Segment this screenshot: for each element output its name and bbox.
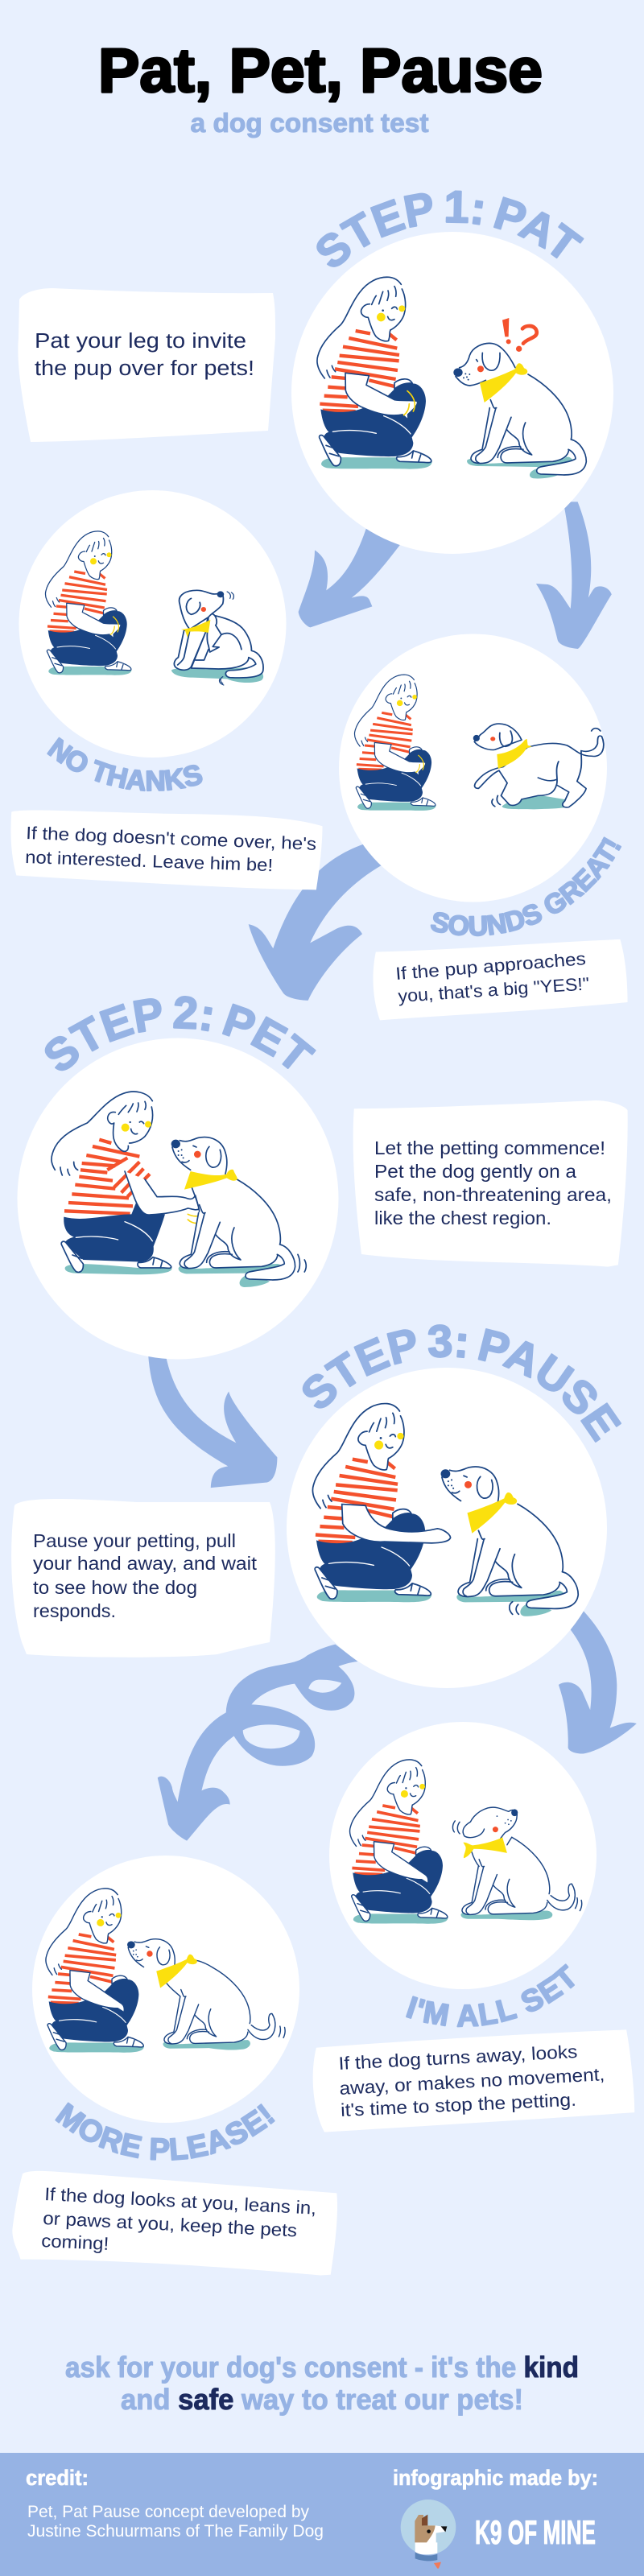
text block: step 1: Pat your leg to invite [35, 330, 246, 353]
illustration: more please dog leaning in [127, 1939, 285, 2050]
illustration: no thanks woman [45, 531, 131, 675]
arrow: step 2 to step 3 [148, 1348, 277, 1488]
text block: no thanks [10, 811, 323, 890]
text block: no thanks: If the dog doesn't come over, he's [26, 823, 317, 854]
heading: all set: I'M ALL SET [406, 1963, 575, 2027]
arrow: step 3 to all set [559, 1602, 637, 1754]
footer credit text [27, 2503, 324, 2541]
closing message: and safe way to treat our pets! [121, 2383, 523, 2416]
footer credit heading: credit: [26, 2466, 89, 2490]
text block: step 2: Let the petting commence! [374, 1137, 605, 1158]
text block: more please [12, 2171, 337, 2276]
text block: step 3: Pause your petting, pull [33, 1530, 236, 1551]
text block: all set: If the dog turns away, looks [338, 2041, 578, 2074]
panel: step 1 circle [291, 232, 613, 554]
title: Pat, Pet, Pause [98, 36, 543, 105]
heading: step 3: STEP 3: PAUSE [303, 1324, 621, 1443]
arrow: sounds great to step 2 [249, 835, 394, 1001]
text block: more please: or paws at you, keep the pets [43, 2208, 298, 2240]
subtitle: a dog consent test [190, 108, 429, 138]
footer credit text: Pet, Pat Pause concept developed by [27, 2503, 309, 2521]
closing message: ask for your dog's consent - it's the kind [65, 2351, 579, 2384]
heading: step 1: STEP 1: PAT [316, 190, 584, 267]
text block: step 2: Pet the dog gently on a [374, 1161, 576, 1182]
heading: no thanks: NO THANKS [47, 737, 203, 792]
text block: sounds great [373, 939, 628, 1020]
text block: all set: away, or makes no movement, [339, 2064, 605, 2099]
arrow: step 1 to no thanks [299, 523, 408, 627]
panel: more please circle [32, 1856, 299, 2123]
heading: more please: MORE PLEASE! [55, 2103, 275, 2161]
illustration: no thanks scratching dog [171, 590, 263, 685]
text block: step 3: to see how the dog [33, 1577, 197, 1598]
text block: step 1 [18, 288, 275, 442]
panel: step 2 circle [18, 1038, 338, 1359]
illustration: step 1 woman [317, 277, 432, 469]
illustration: step 2 dog looking up [171, 1137, 306, 1287]
illustration: step 3 dog [441, 1467, 578, 1616]
panel: step 3 circle [287, 1368, 607, 1688]
text block: all set: it's time to stop the petting. [341, 2090, 576, 2120]
panel: sounds great circle [339, 634, 607, 902]
text block: step 2: safe, non-threatening area, [374, 1184, 612, 1205]
arrow: step 1 to sounds great [536, 502, 612, 649]
footer credit text: Justine Schuurmans of The Family Dog [27, 2522, 324, 2541]
text block: step 1: the pup over for pets! [35, 357, 254, 380]
illustration: step 1 dog with question marks [453, 318, 586, 478]
footer band [0, 2453, 644, 2576]
text block: step 3 [11, 1499, 275, 1657]
closing message [65, 2351, 579, 2416]
illustration: all set woman [350, 1760, 448, 1924]
text block: all set [313, 2029, 634, 2132]
text block: more please: coming! [41, 2231, 109, 2254]
text block: step 2: like the chest region. [374, 1208, 551, 1228]
arrow: step 3 looping to more please [158, 1645, 357, 1841]
illustration: sounds great walking dog [473, 724, 604, 809]
illustration: sounds great woman [354, 675, 436, 811]
text block: step 3: your hand away, and wait [33, 1553, 258, 1574]
icon: k9 of mine dog logo [401, 2500, 456, 2569]
text block: sounds great: If the pup approaches [394, 948, 587, 984]
text block: step 2 [353, 1100, 628, 1267]
heading: sounds great: SOUNDS GREAT! [430, 836, 621, 937]
heading: step 2: STEP 2: PET [45, 996, 316, 1071]
text block: step 3: responds. [33, 1600, 116, 1621]
text block: sounds great: you, that's a big "YES!" [398, 973, 590, 1006]
text block: more please: If the dog looks at you, leans in, [44, 2184, 317, 2219]
illustration: all set dog looking away [452, 1807, 582, 1920]
text block: no thanks: not interested. Leave him be! [25, 847, 273, 875]
panel: all set circle [329, 1722, 597, 1989]
illustration: more please woman [46, 1889, 144, 2053]
panel: no thanks circle [19, 490, 287, 758]
footer maker heading: infographic made by: [393, 2466, 598, 2490]
illustration: step 3 woman pausing [312, 1404, 451, 1602]
illustration: step 2 woman petting [52, 1092, 199, 1274]
